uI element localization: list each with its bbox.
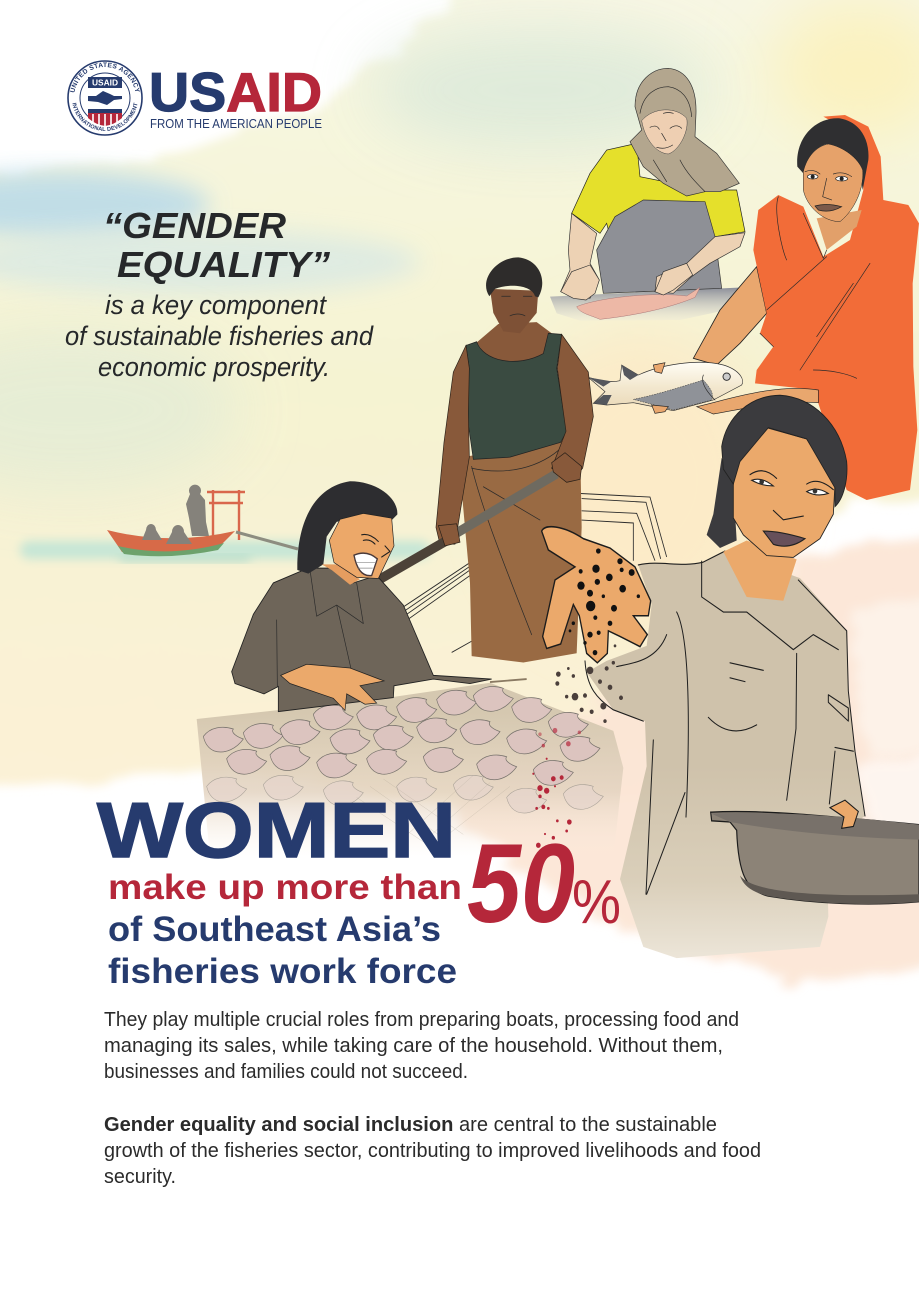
- quote text: of sustainable fisheries and: [65, 321, 374, 351]
- neck: [723, 541, 797, 601]
- hair: [297, 481, 397, 574]
- illustration: boat at sea: [20, 485, 430, 561]
- heading word: WOMEN: [97, 786, 456, 874]
- paragraph one: [104, 1009, 739, 1083]
- boat: [107, 530, 235, 555]
- subheading: [108, 868, 462, 991]
- quote title: “GENDER: [103, 205, 287, 246]
- yellow shirt: [572, 143, 745, 237]
- sari: [753, 115, 919, 500]
- seeds in palm: [569, 548, 640, 655]
- heading: WOMEN 50%: [97, 786, 621, 991]
- subheading: make up more than: [108, 868, 462, 907]
- face: [642, 110, 687, 154]
- lower arm and hand: [697, 388, 818, 414]
- neck: [322, 564, 360, 585]
- facial features: [750, 471, 833, 546]
- hijab: [630, 68, 739, 196]
- logo wordmark: USAID: [149, 61, 322, 123]
- quote title: EQUALITY”: [117, 244, 331, 285]
- left arm: [561, 213, 599, 298]
- logo seal: [67, 60, 143, 136]
- back hair: [707, 458, 737, 548]
- pole: [457, 474, 557, 533]
- logo seal: INTERNATIONAL DEVELOPMENT: [72, 102, 138, 131]
- fish: [588, 362, 743, 411]
- face: [803, 144, 863, 222]
- hand: [281, 664, 384, 711]
- paragraph one: managing its sales, while taking care of the household. Without them,: [104, 1035, 723, 1057]
- red seeds: [532, 728, 581, 848]
- quote heading: [65, 205, 374, 382]
- fingers: [652, 363, 668, 413]
- fishers: [142, 485, 209, 544]
- background watercolor wash: [0, 0, 919, 985]
- face: [329, 513, 394, 578]
- paragraph two: Gender equality and social inclusion are central to the sustainable: [104, 1114, 717, 1136]
- sari folds: [760, 197, 870, 378]
- body text: [104, 1009, 761, 1188]
- apron: [597, 200, 722, 293]
- smile: [354, 553, 377, 576]
- bowl: [711, 800, 919, 904]
- hair: [797, 118, 869, 190]
- illustration: smiling woman at net: [232, 481, 527, 712]
- fishing platform: [207, 490, 245, 540]
- table: [550, 287, 743, 321]
- quote text: economic prosperity.: [98, 352, 330, 382]
- water: [20, 541, 430, 561]
- quote text: [65, 290, 374, 382]
- hands: [438, 453, 582, 546]
- paragraph two: growth of the fisheries sector, contributing to improved livelihoods and food: [104, 1140, 761, 1162]
- net base: [197, 683, 623, 857]
- face: [733, 428, 835, 557]
- arms: [436, 345, 469, 544]
- upper arm: [693, 267, 767, 365]
- neck and chest: [477, 322, 552, 368]
- net mesh: [357, 775, 510, 842]
- net stick: [490, 679, 527, 682]
- quote title: [103, 205, 331, 285]
- shirt: [232, 568, 492, 712]
- logo: USAID: [67, 60, 322, 136]
- paragraph two: [104, 1114, 761, 1188]
- statistic: 50: [467, 821, 575, 946]
- hair: [722, 395, 847, 507]
- hijab fold: [640, 87, 705, 192]
- illustration: woman cutting fish with hijab: [550, 68, 745, 321]
- head: [490, 289, 538, 333]
- subheading: fisheries work force: [108, 952, 457, 991]
- right arm: [655, 233, 745, 293]
- paragraph two: security.: [104, 1166, 176, 1188]
- tank top: [466, 333, 567, 459]
- boat frame lines: [403, 493, 667, 652]
- neck: [817, 210, 862, 250]
- logo tagline: FROM THE AMERICAN PEOPLE: [150, 117, 322, 131]
- shirt: [587, 551, 865, 958]
- sarong: [462, 440, 582, 662]
- hands: [561, 263, 693, 300]
- statistic: %: [572, 868, 621, 937]
- subheading: of Southeast Asia’s: [108, 910, 441, 949]
- illustration: net with drying fish: [197, 683, 623, 857]
- hand: [542, 527, 651, 663]
- paragraph one: businesses and families could not succeed.: [104, 1061, 468, 1083]
- illustration: woman in orange sari holding fish: [588, 115, 919, 500]
- falling seeds: [555, 644, 623, 723]
- logo seal: USAID: [92, 78, 118, 88]
- quote text: is a key component: [105, 290, 327, 320]
- shirt details: [585, 551, 865, 894]
- fish on net: [203, 687, 600, 785]
- paragraph one: They play multiple crucial roles from preparing boats, processing food and: [104, 1009, 739, 1031]
- illustration: woman scattering seed: [532, 395, 919, 958]
- features: [805, 170, 852, 211]
- fish fillet: [577, 287, 700, 319]
- eye and nose: [362, 534, 390, 557]
- logo seal: UNITED STATES AGENCY: [70, 62, 140, 92]
- illustration: woman with pole: [377, 257, 667, 662]
